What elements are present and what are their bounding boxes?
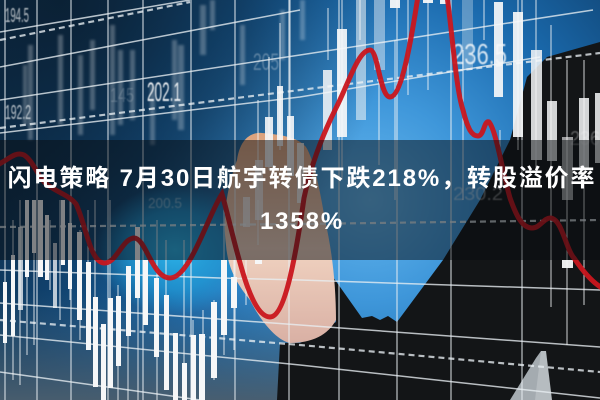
hand: [225, 133, 336, 343]
faint numbers: 236.5: [452, 39, 507, 71]
red trend line: [0, 0, 600, 317]
faint numbers: 145: [110, 85, 134, 107]
title: 闪电策略 7月30日航宇转债下跌218%，转股溢价率: [8, 165, 596, 192]
faint numbers: 192.2: [5, 102, 31, 124]
title background band: [0, 140, 600, 260]
title: [8, 165, 596, 235]
jacket silhouette: [277, 42, 600, 400]
faint numbers: 202.1: [147, 77, 181, 107]
title: 1358%: [260, 208, 344, 235]
faint background candlesticks: [23, 0, 305, 145]
faint numbers: 194.5: [5, 5, 29, 27]
faint numbers: 205: [253, 49, 279, 76]
faint numbers: 200.5: [148, 195, 182, 212]
faint numbers: [5, 5, 600, 212]
faint numbers: 230.2: [453, 184, 503, 204]
